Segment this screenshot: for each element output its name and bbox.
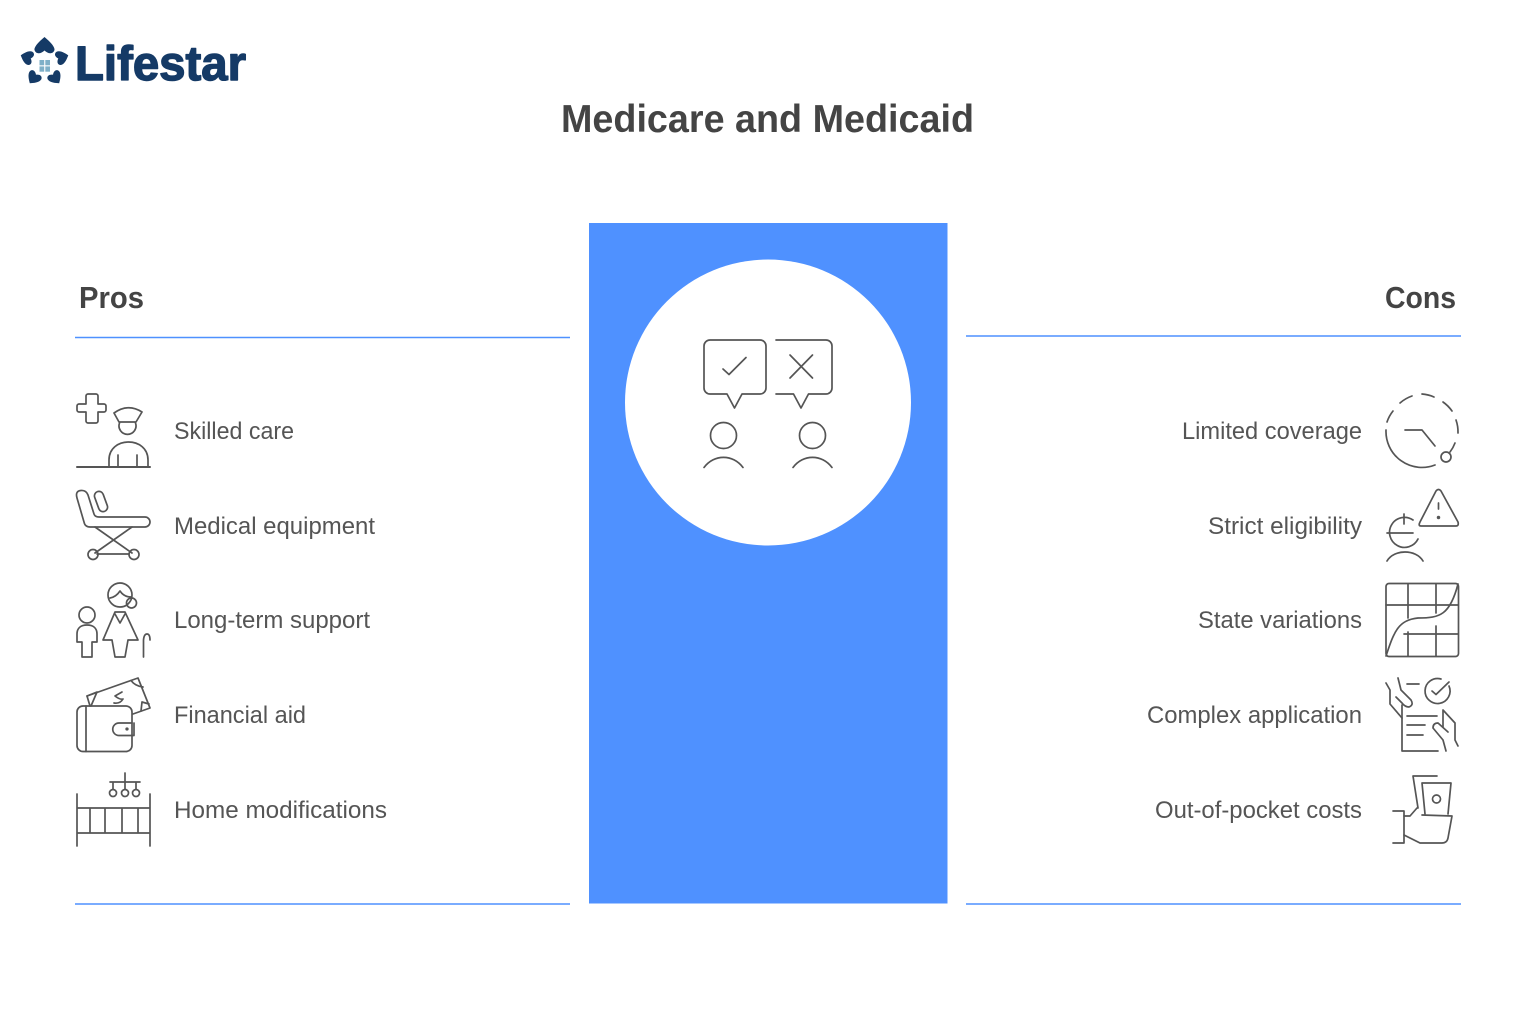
- con: Strict eligibility: Strict eligibility: [1208, 513, 1362, 540]
- con: Complex application: Complex application: [1147, 702, 1362, 729]
- pro: Financial aid: [77, 678, 306, 752]
- con: Out-of-pocket costs: [1155, 776, 1452, 843]
- icon: map grid with curve: [1386, 584, 1458, 656]
- icon: hospital bed: [76, 490, 150, 560]
- title: Medicare and Medicaid: [561, 98, 974, 141]
- icon: nurse: [77, 394, 150, 467]
- icon: two people with approve and reject speech bubbles: [704, 340, 832, 468]
- pro: Skilled care: Skilled care: [174, 418, 294, 445]
- icon: hands with checked form: [1386, 678, 1458, 751]
- white circle: [625, 260, 911, 546]
- icon: elderly woman and child: [77, 583, 150, 657]
- logo wordmark: Lifestar: [75, 38, 246, 91]
- pro: Skilled care: [77, 394, 294, 467]
- con: State variations: State variations: [1198, 607, 1362, 634]
- pro: Medical equipment: [76, 490, 375, 560]
- con: Limited coverage: Limited coverage: [1182, 418, 1362, 445]
- pro: Long-term support: [77, 583, 370, 657]
- icon: person with warning triangle: [1387, 490, 1458, 561]
- con: Limited coverage: [1182, 394, 1458, 467]
- icon: dashed dial: [1386, 394, 1458, 467]
- icon: wallet with cash: [77, 678, 150, 752]
- icon: hand holding bills: [1393, 776, 1452, 843]
- pro: Financial aid: Financial aid: [174, 702, 306, 729]
- pro: Medical equipment: Medical equipment: [174, 513, 375, 540]
- logo icon: five hearts and window: [19, 37, 70, 87]
- pro: Long-term support: Long-term support: [174, 607, 370, 634]
- con: State variations: [1198, 584, 1458, 656]
- logo: Lifestar: [19, 37, 246, 91]
- panel: pros: [75, 280, 570, 904]
- icon: crib with mobile: [77, 773, 150, 846]
- con: Out-of-pocket costs: Out-of-pocket costs: [1155, 797, 1362, 824]
- con: Complex application: [1147, 678, 1458, 751]
- heading: Cons: Cons: [1385, 280, 1456, 315]
- heading: Pros: Pros: [79, 280, 144, 315]
- pro: Home modifications: Home modifications: [174, 797, 387, 824]
- con: Strict eligibility: [1208, 490, 1458, 561]
- panel: cons: [966, 280, 1461, 904]
- pro: Home modifications: [77, 773, 387, 846]
- panel: center blue column: [589, 223, 948, 904]
